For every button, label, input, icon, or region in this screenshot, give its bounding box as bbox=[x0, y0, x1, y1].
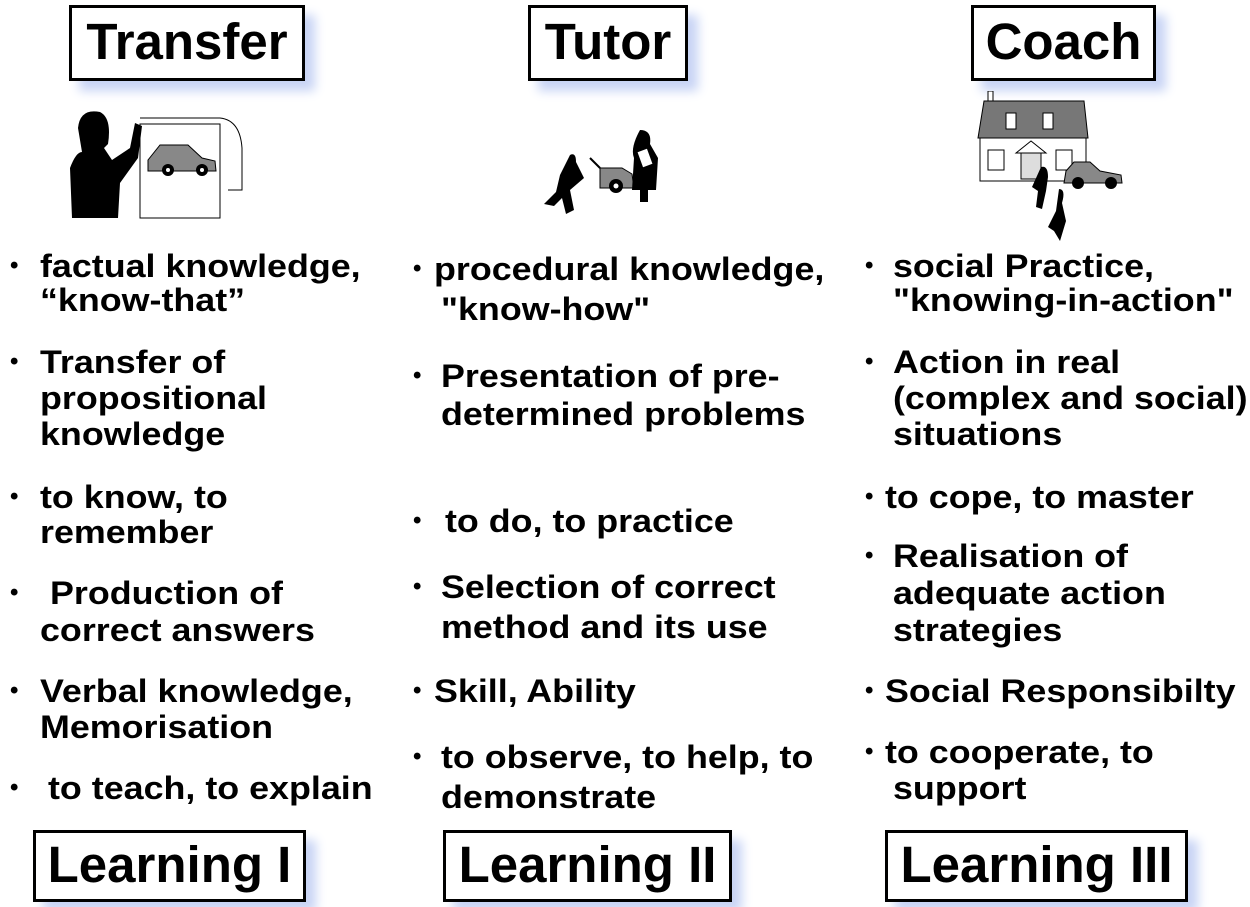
column 1 text: “know-that” bbox=[40, 282, 245, 318]
title: Transfer: Transfer bbox=[86, 13, 288, 70]
column 1 text: • bbox=[10, 348, 18, 375]
column 3 text: • bbox=[865, 483, 873, 510]
icon: house with car and figures bbox=[977, 91, 1123, 241]
column 2 text: demonstrate bbox=[441, 779, 656, 815]
footer: Learning II: Learning II bbox=[459, 836, 716, 893]
column 3 text: • bbox=[865, 252, 873, 279]
column 3 text: strategies bbox=[893, 612, 1062, 648]
column 1 text: • bbox=[10, 774, 18, 801]
column 1 text: • bbox=[10, 252, 18, 279]
title: Tutor: Tutor bbox=[545, 13, 671, 70]
column 2 text: Presentation of pre- bbox=[441, 358, 780, 394]
title: Transfer bbox=[69, 5, 305, 81]
column 3 text: social Practice, bbox=[893, 248, 1154, 284]
column 3 text: support bbox=[893, 770, 1026, 806]
icon: teacher with flip chart bbox=[70, 111, 242, 218]
column 2 text: • bbox=[413, 677, 421, 704]
column 2 text: • bbox=[413, 362, 421, 389]
column 2 text: "know-how" bbox=[441, 291, 650, 327]
column 1 text: factual knowledge, bbox=[40, 248, 361, 284]
column 1 text: • bbox=[10, 579, 18, 606]
column 1 text bbox=[10, 248, 373, 806]
column 2 text: • bbox=[413, 255, 421, 282]
column 3 text: to cope, to master bbox=[885, 479, 1194, 515]
column 3 text: (complex and social) bbox=[893, 380, 1248, 416]
column 1 text: • bbox=[10, 677, 18, 704]
column 1 text: to know, to bbox=[40, 479, 228, 515]
icon: tutor figures and car bbox=[544, 130, 658, 214]
column 2 text: • bbox=[413, 507, 421, 534]
column 3 text: Social Responsibilty bbox=[885, 673, 1236, 709]
footer: Learning I: Learning I bbox=[48, 836, 291, 893]
column 2 text: procedural knowledge, bbox=[434, 251, 824, 287]
column 2 text: Selection of correct bbox=[441, 569, 776, 605]
column 3 text: • bbox=[865, 738, 873, 765]
column 2 text: • bbox=[413, 573, 421, 600]
column 3 text: • bbox=[865, 542, 873, 569]
column 1 text: Transfer of bbox=[40, 344, 225, 380]
column 1 text: remember bbox=[40, 514, 213, 550]
column 3 text: adequate action bbox=[893, 575, 1166, 611]
title: Coach bbox=[971, 5, 1156, 81]
column 3 text: Action in real bbox=[893, 344, 1120, 380]
column 3 text bbox=[865, 248, 1248, 806]
column 2 text: to do, to practice bbox=[445, 503, 734, 539]
column 2 text: determined problems bbox=[441, 396, 805, 432]
title: Coach: Coach bbox=[986, 13, 1141, 70]
column 2 text bbox=[413, 251, 824, 815]
column 3 text: Realisation of bbox=[893, 538, 1128, 574]
column 1 text: Verbal knowledge, bbox=[40, 673, 353, 709]
column 3 text: situations bbox=[893, 416, 1062, 452]
column 2 text: to observe, to help, to bbox=[441, 739, 813, 775]
column 2 text: Skill, Ability bbox=[434, 673, 636, 709]
column 3 text: • bbox=[865, 677, 873, 704]
column 2 text: method and its use bbox=[441, 609, 768, 645]
column 3 text: to cooperate, to bbox=[885, 734, 1154, 770]
column 3 text: "knowing-in-action" bbox=[893, 282, 1234, 318]
column 1 text: Memorisation bbox=[40, 709, 273, 745]
column 1 text: correct answers bbox=[40, 612, 315, 648]
title: Tutor bbox=[528, 5, 688, 81]
column 1 text: propositional bbox=[40, 380, 267, 416]
column 1 text: Production of bbox=[50, 575, 283, 611]
column 1 text: to teach, to explain bbox=[48, 770, 373, 806]
column 1 text: knowledge bbox=[40, 416, 225, 452]
footer: Learning III: Learning III bbox=[900, 836, 1173, 893]
column 3 text: • bbox=[865, 348, 873, 375]
column 1 text: • bbox=[10, 483, 18, 510]
column 2 text: • bbox=[413, 743, 421, 770]
